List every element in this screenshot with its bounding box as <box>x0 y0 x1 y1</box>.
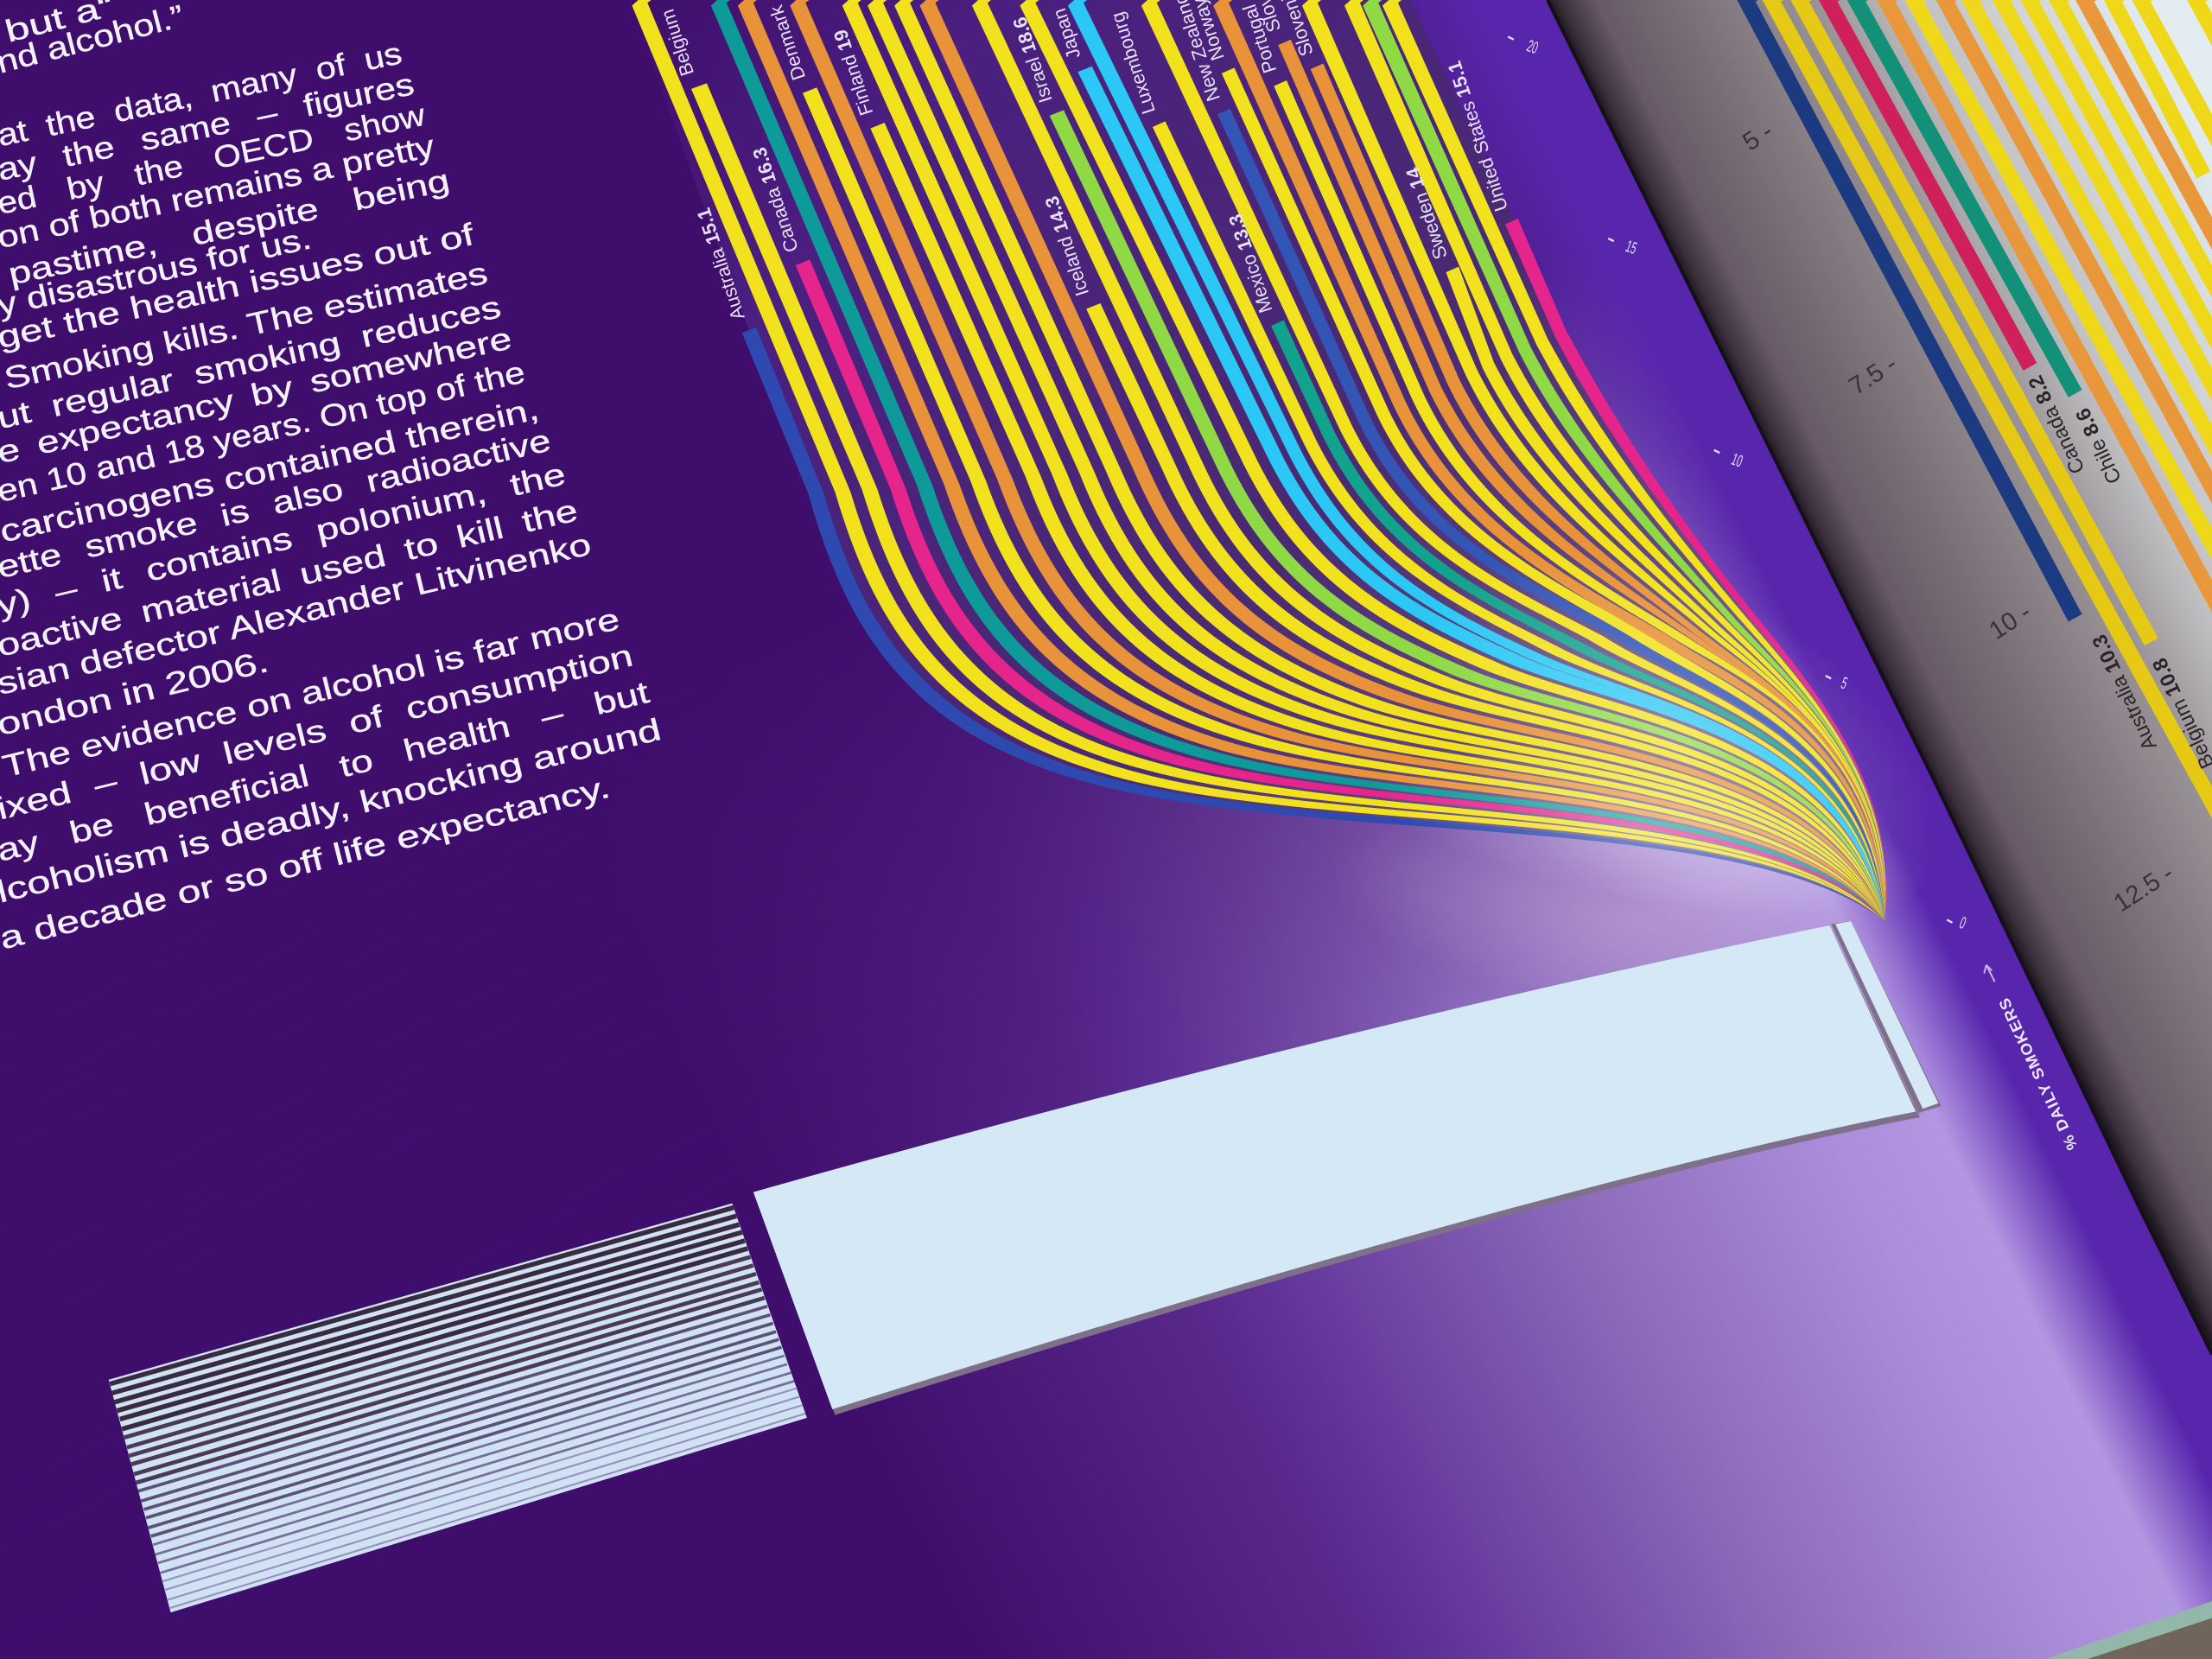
body text column: oactive material used to kill the <box>0 492 581 664</box>
ribbon: Denmark <box>803 87 1885 921</box>
cigarette tip stripe <box>1831 921 1942 1113</box>
ribbon: Sweden <box>1446 267 1885 921</box>
body text column: a decade or so off life expectancy. <box>0 769 613 957</box>
ribbon: Belgium (right page) <box>1799 0 2152 642</box>
ribbon: United Kingdom <box>1382 0 1886 921</box>
ribbon: Korea <box>1068 0 1885 921</box>
ribbon: Turkey <box>1363 0 1885 921</box>
ribbon: France <box>842 0 1885 921</box>
ribbon: United States <box>1505 219 1886 921</box>
country labels on the ribbons: Mexico 13.3 <box>1224 212 1276 315</box>
ribbon: Belgium <box>691 83 1885 921</box>
right page ribbon labels: Chile 8.6 <box>2072 404 2126 487</box>
body text column: lcoholism is deadly, knocking around <box>0 711 664 910</box>
ribbon: Chile (right page) <box>1855 0 2075 394</box>
ribbon: Portugal <box>1274 80 1885 921</box>
body text column: Smoking kills. The estimates <box>1 255 491 396</box>
country labels on the ribbons: Japan <box>1048 6 1084 61</box>
left page axis scale: 10 <box>1729 451 1745 472</box>
ribbon: Finland <box>870 123 1885 921</box>
body text column: on of both remains a pretty <box>0 128 437 255</box>
ribbon: Slovak Republic <box>1278 40 1885 921</box>
country labels on the ribbons: Luxembourg <box>1106 10 1160 117</box>
body text column: pastime, despite being <box>5 162 453 292</box>
body text column: ette smoke is also radioactive <box>0 422 554 585</box>
right page background <box>1548 0 2212 1354</box>
ribbon: Australia (right page) <box>1745 0 2075 618</box>
right page ribbon labels: Australia 10.3 <box>2088 631 2162 753</box>
ribbon: Hungary <box>919 0 1885 921</box>
ribbon: Poland <box>1213 0 1885 921</box>
right page axis scale: 7.5 - <box>1844 349 1902 401</box>
ribbon: Norway <box>1222 67 1885 921</box>
ribbon: Italy <box>1020 0 1885 921</box>
ribbon: Switzerland <box>1344 0 1885 921</box>
body text column: en 10 and 18 years. On top of the <box>0 353 528 509</box>
ribbon: Slovenia <box>1311 63 1885 921</box>
ribbon: Australia <box>742 327 1885 921</box>
body text column: The evidence on alcohol is far more <box>0 601 623 784</box>
ribbon: Estonia <box>790 0 1885 921</box>
right page ribbon labels <box>2024 372 2212 772</box>
country labels on the ribbons: Sweden 14 <box>1402 164 1452 262</box>
ribbon: Ireland <box>972 0 1885 921</box>
right page axis scale: 5 - <box>1738 117 1778 156</box>
ribbon: Greece <box>894 0 1885 921</box>
book edge at the bottom right corner <box>2045 1601 2212 1659</box>
ribbon: Netherlands <box>1141 0 1885 921</box>
ribbon: Canada (right page) <box>1827 0 2030 366</box>
ribbon: New Zealand <box>1217 109 1885 921</box>
purple left page background <box>840 0 2212 1659</box>
right page axis scale: 10 - <box>1984 598 2036 645</box>
ribbon: Spain <box>1302 0 1885 921</box>
ribbon: Israel <box>1050 110 1885 921</box>
ribbon: Mexico <box>1271 321 1885 921</box>
country labels on the ribbons: United States 15.1 <box>1443 59 1512 214</box>
country labels on the ribbons: Australia 15.1 <box>692 206 749 323</box>
ribbon: Czech Republic <box>738 0 1885 921</box>
ribbon: Luxembourg <box>1153 121 1885 921</box>
ribbon: Iceland <box>1086 303 1885 921</box>
body text column: carcinogens contained therein, <box>0 391 542 550</box>
left page axis scale: 20 <box>1524 37 1541 58</box>
cigarette body <box>753 925 1920 1415</box>
country labels on the ribbons: Finland 19 <box>830 27 877 118</box>
right page ribbon labels: Canada 8.2 <box>2024 372 2089 477</box>
country labels on the ribbons: Belgium <box>657 7 698 79</box>
body text column: ay the same – figures <box>0 66 417 188</box>
ribbon: Japan <box>1077 67 1885 921</box>
left page axis scale: 15 <box>1623 238 1639 258</box>
ribbon: Canada <box>796 259 1885 921</box>
body text column: get the health issues out of <box>0 216 478 355</box>
country labels on the ribbons <box>657 0 1512 323</box>
country labels on the ribbons: Portugal <box>1238 2 1281 76</box>
fan of country ribbons <box>629 0 2005 1029</box>
right page axis scale <box>1738 117 2178 918</box>
ribbon: Chile <box>711 0 1885 921</box>
axis title: % DAILY SMOKERS <box>1995 995 2082 1153</box>
left page axis scale: 5 <box>1839 675 1850 693</box>
body text column: ut regular smoking reduces <box>0 289 504 435</box>
body text column: y) – it contains polonium, the <box>0 455 569 623</box>
country labels on the ribbons: Canada 16.3 <box>748 144 803 255</box>
body text column <box>0 0 664 957</box>
body text column: ed by the OECD show <box>0 97 429 221</box>
body text column: sian defector Alexander Litvinenko <box>0 526 594 702</box>
ribbon: Germany <box>868 0 1885 921</box>
body text column: at the data, many of us <box>0 35 404 153</box>
country labels on the ribbons: Denmark <box>765 2 810 83</box>
body text column: ixed – low levels of consumption <box>0 637 636 826</box>
country labels on the ribbons: Israel 18.6 <box>1008 15 1057 105</box>
right page axis scale: 12.5 - <box>2108 859 2178 918</box>
body text column: ay be beneficial to health – but <box>0 674 652 868</box>
country labels on the ribbons: Iceland 14.3 <box>1040 194 1093 299</box>
cigarette filter with stripes <box>109 1204 807 1612</box>
left page axis scale: 0 <box>1957 914 1968 933</box>
ribbon: Austria <box>632 0 1885 921</box>
arrow: axis direction <box>1984 965 1995 982</box>
right page striped ribbon chart <box>1745 0 2212 885</box>
body text column: y disastrous for us. <box>0 220 315 323</box>
left page axis scale <box>1508 36 1968 933</box>
body text column: e expectancy by somewhere <box>0 320 515 470</box>
